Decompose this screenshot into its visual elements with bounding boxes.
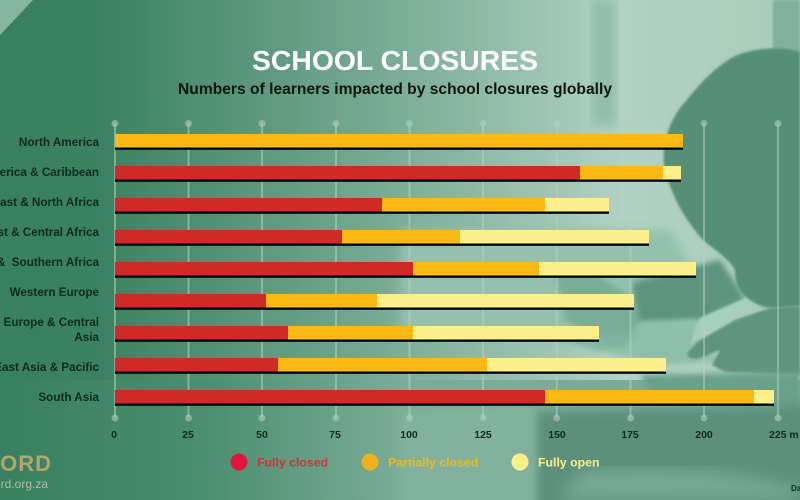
title: SCHOOL CLOSURES xyxy=(252,45,538,76)
x axis labels: 75 xyxy=(329,429,341,441)
x axis labels xyxy=(111,429,799,441)
region labels: South Asia xyxy=(38,391,99,404)
x axis labels: 50 xyxy=(256,429,268,441)
x axis labels: 175 xyxy=(621,429,639,441)
region labels xyxy=(0,136,99,404)
bar: West & Central Africa xyxy=(115,230,649,246)
legend xyxy=(230,454,600,470)
region labels: Western Europe xyxy=(10,286,99,299)
region labels: North America xyxy=(19,136,99,149)
region labels: Asia xyxy=(74,331,99,344)
legend: fully closed xyxy=(230,454,328,470)
subtitle: Numbers of learners impacted by school closures globally xyxy=(178,81,612,98)
bar: South Asia xyxy=(115,390,774,406)
x axis labels: 225 m xyxy=(769,429,799,441)
x axis labels: 200 xyxy=(695,429,713,441)
legend: partially closed: Partially closed xyxy=(388,456,478,470)
x axis labels: 0 xyxy=(111,429,117,441)
legend: fully closed: Fully closed xyxy=(257,456,328,470)
x axis labels: 100 xyxy=(400,429,418,441)
bar: Western Europe xyxy=(115,294,634,310)
x axis labels: 25 xyxy=(182,429,194,441)
legend: fully open: Fully open xyxy=(538,456,600,470)
legend: partially closed xyxy=(362,454,478,470)
logo: ACCORD xyxy=(0,451,52,491)
stacked bar chart xyxy=(115,134,774,406)
bar: East Asia & Pacific xyxy=(115,358,666,374)
x axis labels: 125 xyxy=(474,429,492,441)
bar: Eastern & Southern Africa xyxy=(115,262,696,278)
bar: North America xyxy=(115,134,683,150)
chart gridlines xyxy=(112,120,782,422)
legend: fully open xyxy=(512,454,600,470)
bar: Latin America & Caribbean xyxy=(115,166,681,182)
bar: Middle East & North Africa xyxy=(115,198,609,214)
bar: Eastern Europe & Central Asia xyxy=(115,326,599,342)
x axis labels: 150 xyxy=(548,429,566,441)
